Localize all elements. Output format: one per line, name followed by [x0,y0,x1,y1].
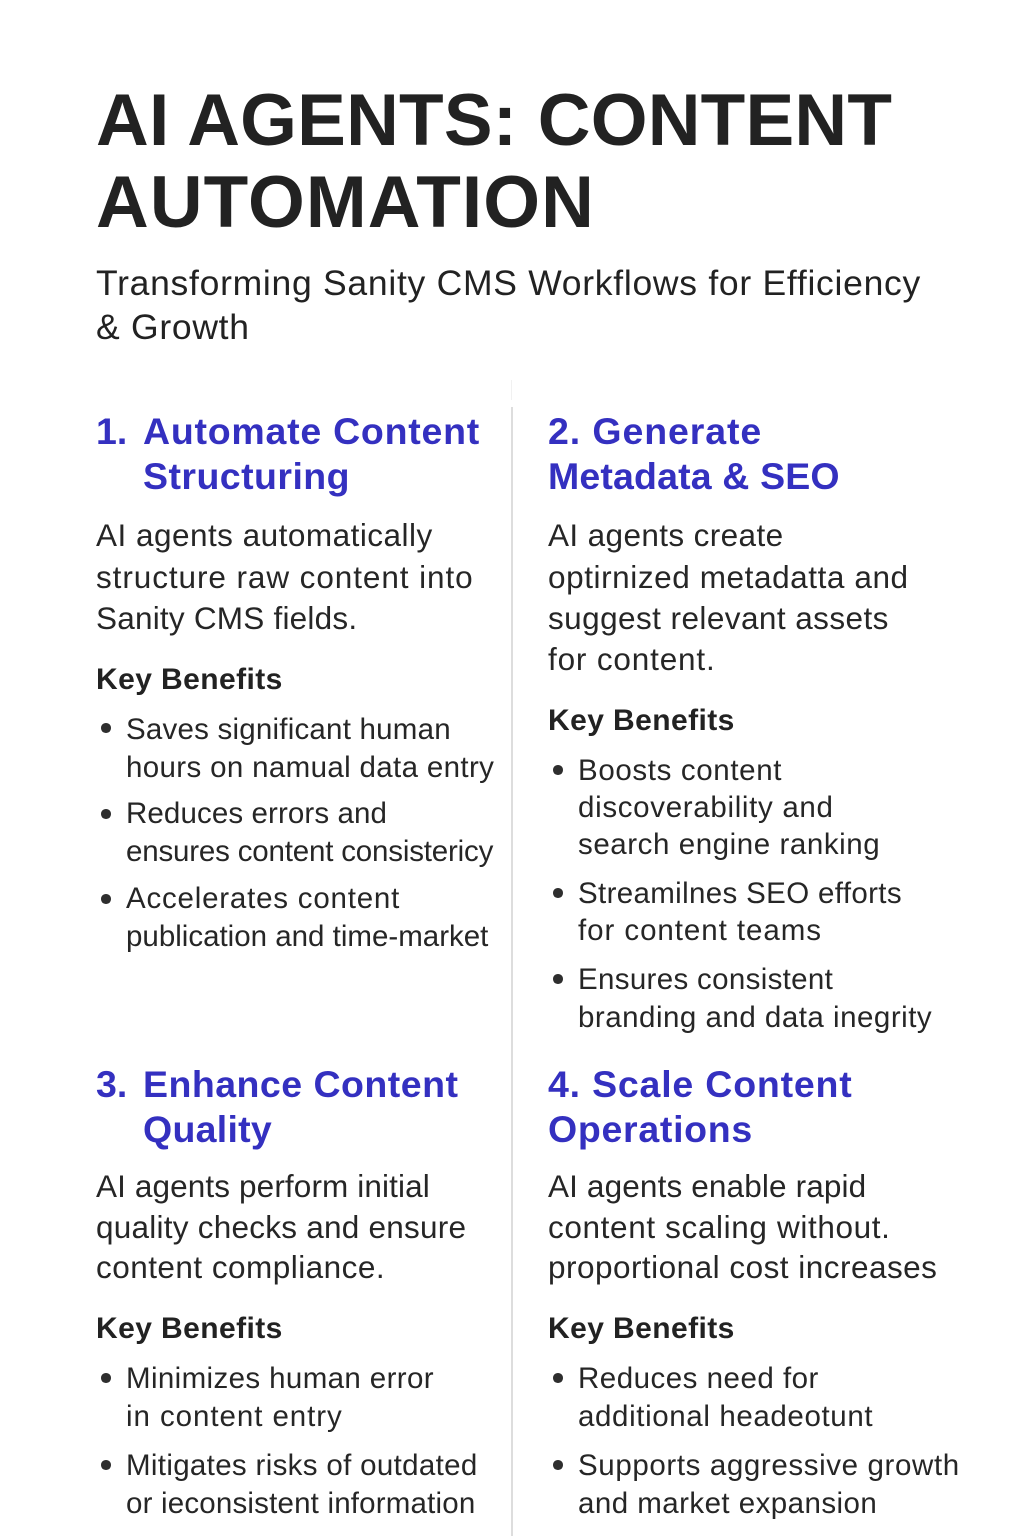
heading: section 3: Enhance Content [143,1063,458,1105]
benefits list: section 1: Accelerates content [126,882,400,915]
benefits list: section 3: or ieconsistent information [126,1487,475,1520]
description: section 2: AI agents create [548,517,783,553]
heading: section 1: Automate Content [143,410,480,452]
heading: section 4 [548,1063,853,1150]
heading: section 4: 4. Scale Content [548,1063,853,1105]
key benefits heading: section 4: Key Benefits [548,1312,735,1345]
benefits list: section 2: discoverability and [578,791,834,824]
benefits list: section 1: Saves significant human [126,713,451,746]
panel: section 2 [548,410,932,1034]
panel: section 1 [96,410,494,953]
subtitle [96,263,921,347]
title: AI AGENTS: CONTENT [96,80,892,161]
panel: section 4 [548,1063,960,1520]
subtitle: & Growth [96,307,250,347]
description: section 4: proportional cost increases [548,1249,937,1285]
benefits list: section 4: additional headeotunt [578,1400,873,1433]
benefits list: section 4: Reduces need for [578,1362,819,1395]
benefits list: section 4 [553,1362,960,1520]
description: section 1: Sanity CMS fields. [96,600,357,636]
title: AUTOMATION [96,162,595,243]
benefits list: section 3 [101,1362,478,1520]
benefits list: section 2: for content teams [578,914,822,947]
benefits list: section 3: Mitigates risks of outdated [126,1449,478,1482]
benefits list: section 4: Supports aggressive growth [578,1449,960,1482]
heading: section 1: 1. [96,410,127,452]
description: section 3: AI agents perform initial [96,1168,430,1204]
benefits list: section 1: ensures content consistericy [126,835,493,868]
description: section 4: AI agents enable rapid [548,1168,866,1204]
benefits list: section 1: hours on namual data entry [126,751,494,784]
description: section 1 [96,517,474,636]
heading: section 2: Metadata & SEO [548,455,840,497]
heading: section 3: Quality [143,1108,272,1150]
benefits list: section 2 [553,754,932,1034]
benefits list: section 2: Streamilnes SEO efforts [578,877,902,910]
panel: section 3 [96,1063,478,1520]
heading: section 3: 3. [96,1063,127,1105]
title [96,80,892,243]
description: section 3: quality checks and ensure [96,1209,466,1245]
description: section 4: content scaling without. [548,1209,891,1245]
heading: section 2 [548,410,840,497]
benefits list: section 2: search engine ranking [578,828,880,861]
description: section 2: for content. [548,641,716,677]
key benefits heading: section 1: Key Benefits [96,663,283,696]
description: section 3: content compliance. [96,1249,385,1285]
benefits list: section 4: and market expansion [578,1487,877,1520]
heading: section 4: Operations [548,1108,753,1150]
heading: section 1 [96,410,480,497]
heading: section 2: 2. Generate [548,410,762,452]
description: section 2: suggest relevant assets [548,600,889,636]
benefits list: section 1: Reduces errors and [126,797,387,830]
heading: section 3 [96,1063,458,1150]
key benefits heading: section 3: Key Benefits [96,1312,283,1345]
description: section 2 [548,517,909,677]
description: section 3 [96,1168,466,1285]
description: section 4 [548,1168,937,1285]
description: section 2: optirnized metadatta and [548,559,909,595]
benefits list: section 3: Minimizes human error [126,1362,434,1395]
benefits list: section 1: publication and time-market [126,920,488,953]
key benefits heading: section 2: Key Benefits [548,704,735,737]
benefits list: section 2: branding and data inegrity [578,1001,932,1034]
heading: section 1: Structuring [143,455,350,497]
column divider [511,407,513,1536]
benefits list: section 3: in content entry [126,1400,343,1433]
benefits list: section 2: Boosts content [578,754,782,787]
benefits list: section 1 [101,713,494,953]
subtitle: Transforming Sanity CMS Workflows for Efficiency [96,263,921,303]
description: section 1: AI agents automatically [96,517,433,553]
benefits list: section 2: Ensures consistent [578,963,833,996]
description: section 1: structure raw content into [96,559,474,595]
